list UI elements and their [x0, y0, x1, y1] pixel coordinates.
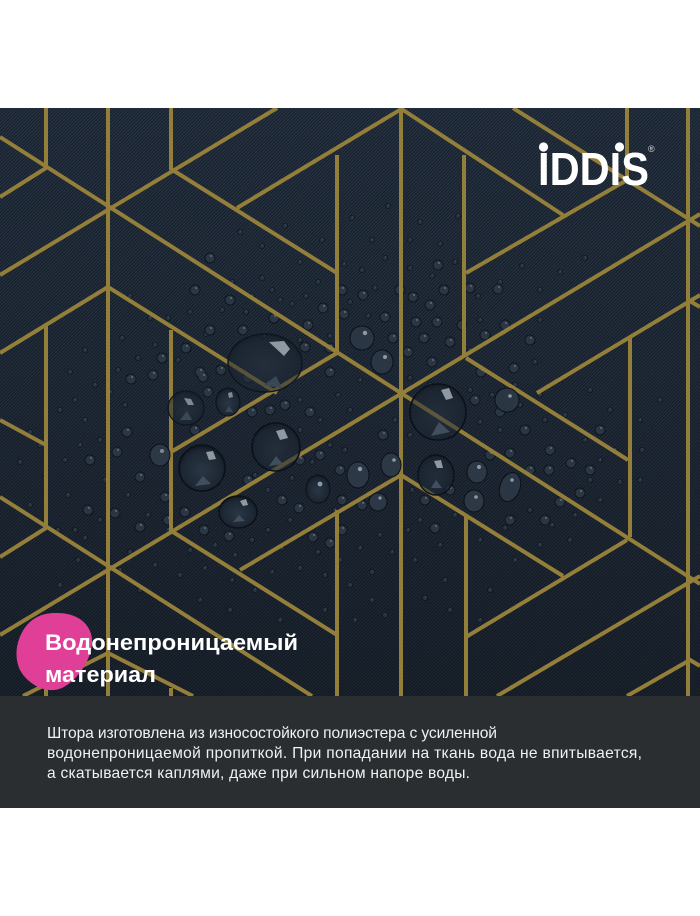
description text: Штора изготовлена из износостойкого полиэстера с усиленной	[47, 725, 497, 742]
heading: Водонепроницаемый	[45, 630, 298, 655]
gold geometric lines	[0, 108, 700, 696]
droplet K	[150, 444, 170, 466]
pink accent blob	[16, 613, 92, 690]
droplet P	[381, 453, 401, 477]
droplet B	[168, 391, 204, 425]
heading: материал	[45, 662, 156, 687]
small water droplets	[20, 205, 660, 620]
droplet A	[228, 334, 302, 392]
droplet H	[418, 455, 454, 495]
logo dot 2	[615, 142, 624, 152]
droplet O	[464, 490, 484, 512]
description text: а скатывается каплями, даже при сильном напоре воды.	[47, 765, 470, 782]
droplet G	[410, 384, 466, 440]
description text: водонепроницаемой пропиткой. При попадании на ткань вода не впитывается,	[47, 745, 642, 762]
droplet F	[219, 496, 257, 528]
droplet C	[216, 388, 240, 416]
medium water droplets	[88, 256, 601, 543]
infographic page	[0, 108, 700, 808]
dark description panel	[0, 696, 700, 808]
droplet E	[252, 423, 300, 471]
droplet Q	[369, 493, 387, 511]
droplet S	[495, 388, 519, 412]
fabric shading	[0, 418, 700, 696]
droplet L	[350, 326, 374, 350]
logo wordmark: IDDIS	[538, 143, 649, 195]
droplet I	[306, 475, 330, 503]
large water droplets	[150, 326, 525, 528]
logo: IDDIS	[538, 142, 655, 195]
fabric background	[0, 108, 700, 696]
droplet R	[498, 472, 522, 502]
droplet J	[347, 462, 369, 488]
logo dot 1	[539, 142, 548, 152]
droplet M	[371, 350, 393, 374]
droplet D	[179, 445, 225, 491]
photo: navy water-resistant fabric with gold geometric print	[0, 108, 700, 696]
droplet N	[467, 461, 487, 483]
registered mark: ®	[648, 144, 655, 154]
